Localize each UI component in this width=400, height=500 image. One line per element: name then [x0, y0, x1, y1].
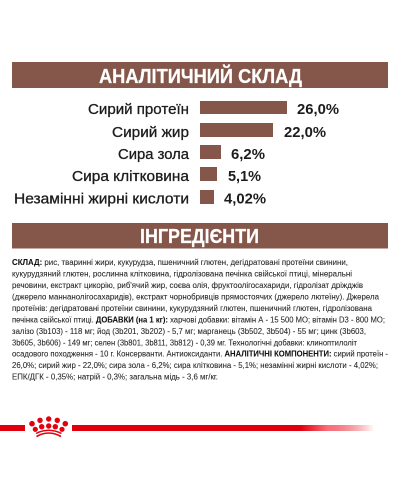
text block: ingredients list	[12, 257, 388, 382]
heading banner: ingredients: ІНГРЕДІЄНТИ	[140, 226, 259, 248]
text block: ingredients list: речовини, екстракт цикорію, риб'ячий жир, соєва олія, фруктоолігосахариди, гідролізат дріжджів	[12, 280, 363, 290]
text block: ingredients list: осадового походження - 10 г. Консерванти. Антиоксиданти. АНАЛІТИЧНІ КОМПОНЕНТИ: сирий протеїн -	[12, 348, 388, 358]
panel: ingredients	[12, 223, 388, 382]
footer: red brand line	[0, 425, 373, 431]
row: crude ash	[118, 145, 265, 163]
row: crude fat: Сирий жир	[112, 125, 189, 141]
row: crude fibre	[72, 167, 261, 185]
row: crude ash: Сира зола	[118, 147, 190, 163]
row: crude fat: 22,0%	[284, 125, 326, 141]
row: crude protein	[88, 101, 339, 118]
heading banner: analytical composition	[12, 62, 388, 88]
row: crude ash: 6,2%	[231, 147, 265, 163]
row: crude protein: Сирий протеїн	[88, 102, 189, 118]
row: essential fatty acids: 4,02%	[224, 192, 266, 208]
text block: ingredients list: 3b605, 3b606) - 149 мг; селен (3b801, 3b811, 3b812) - 0,39 мг. Технологічні добавки: клиноптилоліт	[12, 338, 357, 348]
text block: ingredients list: залізо (3b103) - 118 мг; йод (3b201, 3b202) - 5,7 мг; марганець (3b502, 3b504) - 55 мг; цинк (3b603,	[12, 326, 366, 336]
text block: ingredients list: протеїнів: дегідратовані протеїни свинини, кукурудзяний глютен, пшеничний глютен, гідролізована	[12, 303, 372, 313]
text block: ingredients list: печінка свійської птиці. ДОБАВКИ (на 1 кг): харчові добавки: вітамін А - 15 500 МО; вітамін D3 - 800 МО;	[12, 314, 385, 324]
row: crude protein: 26,0%	[297, 102, 339, 118]
row: essential fatty acids: Незамінні жирні кислоти	[14, 192, 189, 208]
row: crude fibre: 5,1%	[228, 169, 261, 185]
row: crude fat	[112, 123, 326, 141]
panel: analytical composition	[12, 62, 388, 208]
row: crude fibre: Сира клітковина	[72, 169, 190, 185]
bar chart: composition percentages	[14, 101, 339, 208]
text block: ingredients list: СКЛАД: рис, тваринні жири, кукурудза, пшеничний глютен, дегідратовані протеїни свинини,	[12, 257, 348, 267]
icon: Royal Canin crown logo	[29, 416, 68, 436]
text block: ingredients list: кукурудзяний глютен, рослинна клітковина, гідролізована печінка свійської птиці, мінеральні	[12, 268, 352, 278]
heading banner: ingredients	[12, 223, 388, 248]
row: essential fatty acids	[14, 190, 266, 208]
text block: ingredients list: ЕПК/ДГК - 0,35%; натрій - 0,3%; загальна мідь - 3,6 мг/кг.	[12, 372, 218, 382]
heading banner: analytical composition: АНАЛІТИЧНИЙ СКЛАД	[99, 64, 302, 88]
